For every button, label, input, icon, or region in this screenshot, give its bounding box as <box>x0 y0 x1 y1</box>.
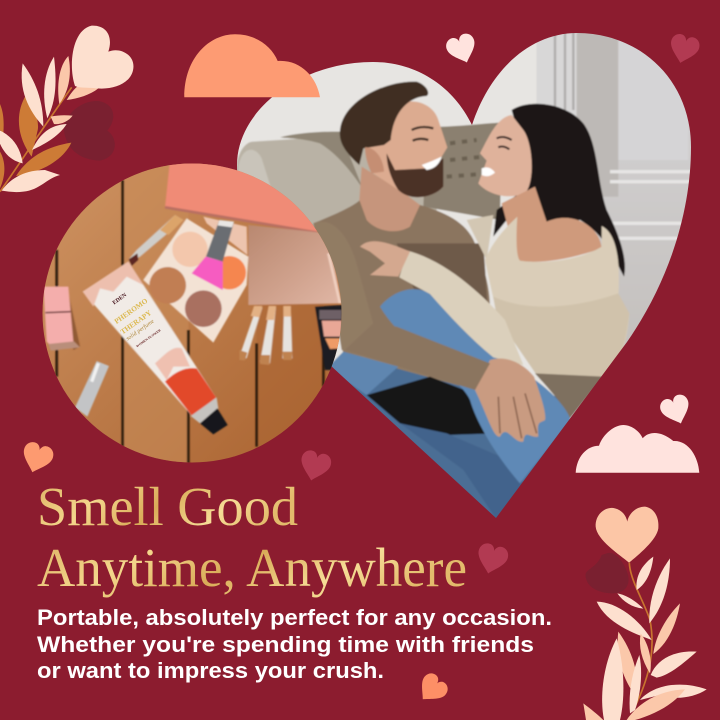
makeup brushes <box>239 307 262 358</box>
heart: top right <box>666 32 701 67</box>
woman's hair <box>493 104 625 277</box>
pink brush <box>206 220 234 262</box>
circle photo: cosmetics flat lay <box>42 160 343 463</box>
tube label text <box>112 292 161 348</box>
lower body base <box>332 366 564 518</box>
heart: centre rose <box>297 448 333 484</box>
heart: right <box>658 392 694 428</box>
body text: or want to impress your crush. <box>37 658 384 683</box>
body text <box>37 605 552 683</box>
woman's sweater <box>484 216 626 344</box>
palette <box>143 218 248 343</box>
tube label text: WOMEN FLOWER <box>135 328 162 348</box>
tube label text: PHEROMO <box>112 296 150 326</box>
heart: beside heading <box>474 541 510 577</box>
sofa <box>237 138 438 228</box>
top left branch with hearts <box>0 26 133 192</box>
heading: Smell Good <box>37 476 298 537</box>
tube <box>83 262 216 417</box>
small brush <box>128 216 174 260</box>
tube label text: THERAPY <box>119 308 154 336</box>
heart photo: couple <box>230 30 700 523</box>
notebook <box>248 225 342 305</box>
lipstick <box>75 361 109 417</box>
jeans <box>330 352 398 395</box>
heart: bottom orange <box>413 670 451 708</box>
eye shadow strip <box>315 305 343 370</box>
heading: Anytime, Anywhere <box>37 537 467 598</box>
tube label text: solid perfume <box>125 318 156 342</box>
tube cap <box>191 397 218 423</box>
man's sweater <box>314 200 490 356</box>
body text: Portable, absolutely perfect for any occasion. <box>37 605 552 630</box>
nail polish <box>70 301 80 350</box>
man's neck and head <box>359 167 420 231</box>
body text: Whether you're spending time with friends <box>37 632 534 657</box>
makeup pouch <box>165 160 320 233</box>
peach cloud <box>184 34 320 97</box>
bottom right branch with hearts <box>583 507 707 720</box>
tube label text: EDEN <box>112 292 129 306</box>
heart: left orange <box>18 440 56 477</box>
heart: top centre <box>444 31 480 67</box>
pale cloud <box>576 425 699 473</box>
heading <box>37 476 467 598</box>
